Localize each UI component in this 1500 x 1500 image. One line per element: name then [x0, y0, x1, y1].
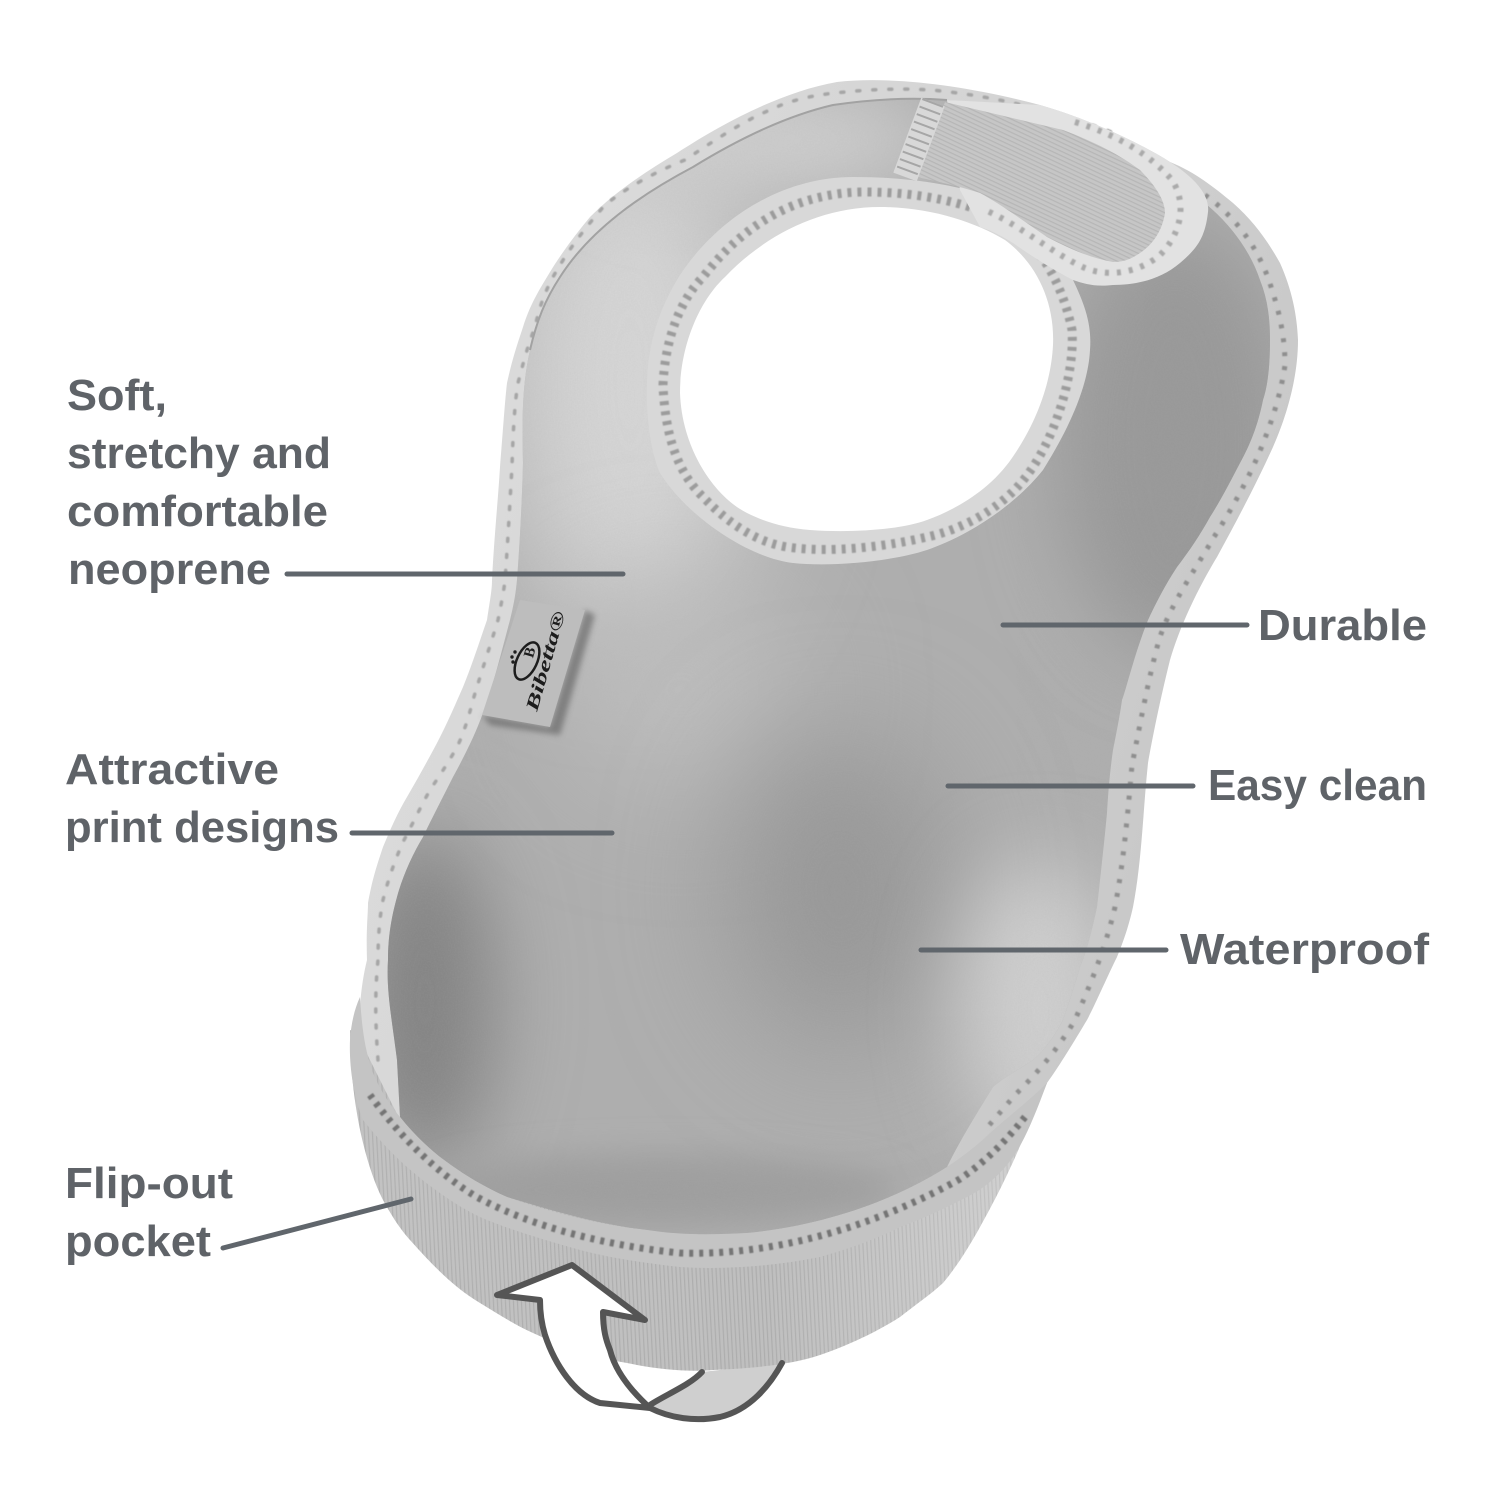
seam stitches — [905, 102, 933, 177]
callout: flip-out pocket — [65, 1159, 411, 1266]
neck hole — [680, 207, 1053, 531]
callout: print designs: Attractive — [65, 745, 279, 794]
underside of pocket, visible inside arrow tail — [650, 1363, 782, 1419]
pocket rim stitching — [370, 1095, 1025, 1253]
bib outer rim — [359, 80, 1298, 1170]
callout: print designs — [65, 745, 612, 852]
neck hole rim — [647, 177, 1090, 564]
icon: flip-up arrow — [497, 1265, 782, 1419]
dark edge between rim and face — [530, 99, 947, 350]
label shadow — [482, 610, 595, 735]
product photo: grey bib — [340, 80, 1310, 1419]
callout: easy clean: Easy clean — [1208, 761, 1427, 810]
callout: print designs: print designs — [65, 803, 339, 852]
callout: neoprene: comfortable — [67, 487, 328, 536]
label tag — [482, 600, 585, 727]
label logo: B — [521, 646, 540, 660]
callout: neoprene: neoprene — [68, 545, 271, 594]
pocket top rim — [350, 997, 1047, 1268]
rim stitching: right — [985, 195, 1285, 1130]
rim stitching: left and top — [376, 89, 1120, 1060]
callout: durable: Durable — [1258, 601, 1427, 650]
callout: neoprene: Soft, — [67, 371, 167, 420]
callout: waterproof: Waterproof — [1180, 925, 1429, 974]
callout: neoprene: stretchy and — [67, 429, 331, 478]
bib front face — [388, 100, 1270, 1234]
label wordmark: Bibetta® — [521, 609, 569, 715]
strap seam — [905, 102, 933, 177]
neck strap end rim — [947, 100, 1208, 286]
brand label — [482, 600, 595, 735]
callout: flip-out pocket: Flip-out — [65, 1159, 233, 1208]
flip-out pocket band — [350, 1030, 1047, 1371]
velcro strap panel — [917, 102, 1165, 262]
callout: neoprene — [67, 371, 623, 594]
strap stitching — [985, 122, 1181, 273]
callout: flip-out pocket: pocket — [65, 1217, 211, 1266]
neck rim stitching — [663, 192, 1072, 550]
